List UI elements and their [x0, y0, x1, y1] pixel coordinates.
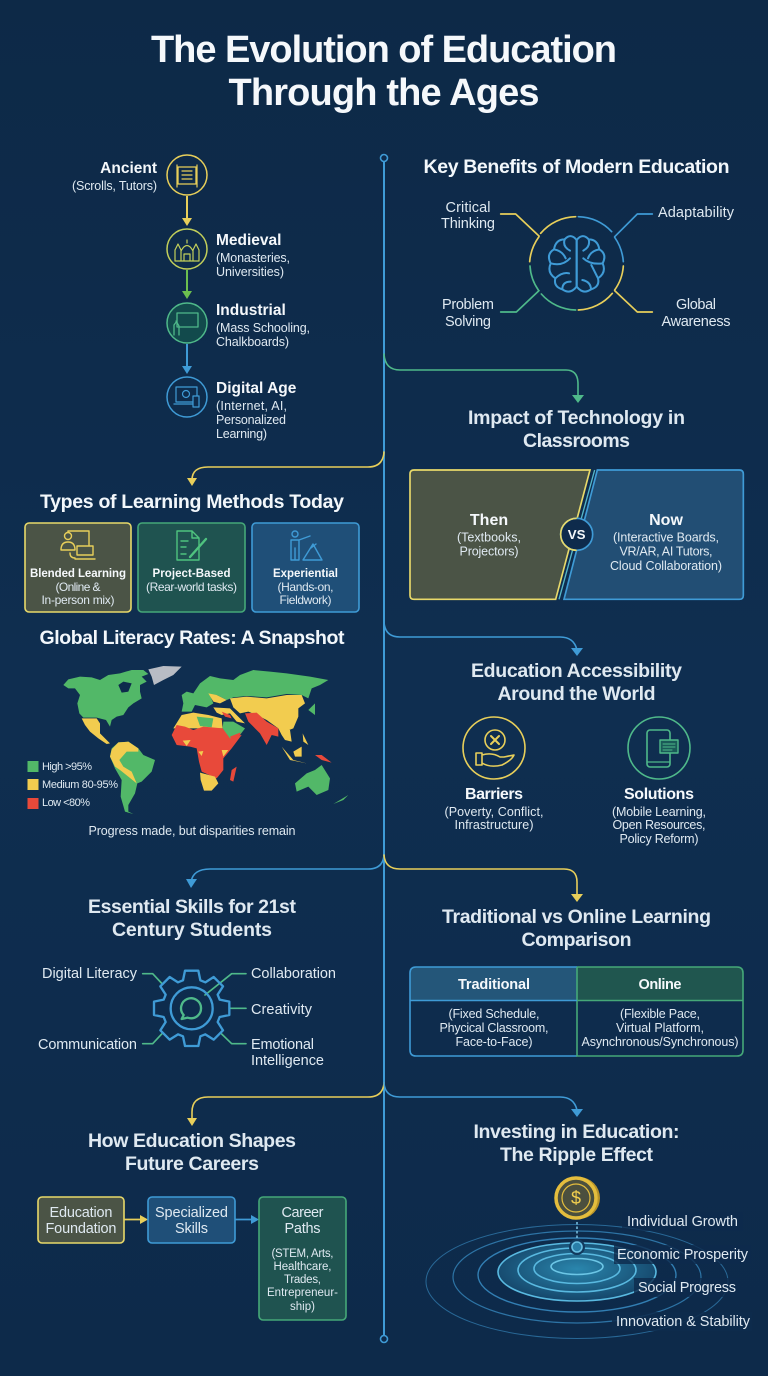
text: medieval: (Monasteries,	[216, 251, 290, 265]
heading: How Education Shapes	[88, 1130, 296, 1152]
skill labels: Collaboration	[251, 966, 336, 982]
heading: Types of Learning Methods Today	[40, 491, 344, 513]
icon: coin: $	[571, 1188, 581, 1208]
card: experiential: (Hands-on,	[278, 580, 334, 594]
heading: Essential Skills for 21st	[88, 896, 296, 918]
comparison table	[410, 967, 743, 1056]
card: project-based: (Rear-world tasks)	[146, 580, 237, 594]
heading: Investing in Education:	[474, 1121, 680, 1143]
text: medieval: Universities)	[216, 265, 284, 279]
then vs now comparison	[410, 470, 743, 599]
gear diagram	[143, 971, 246, 1046]
label: adaptability: Adaptability	[658, 205, 735, 221]
text: now: Cloud Collaboration)	[610, 559, 722, 573]
icon: solutions phone	[628, 717, 690, 779]
box: education foundation: Education	[50, 1205, 112, 1221]
box: career paths: ship)	[290, 1301, 315, 1313]
heading: The Ripple Effect	[500, 1144, 654, 1166]
text: ancient: Ancient	[100, 160, 157, 177]
arrow: to education careers	[187, 1083, 384, 1126]
arrow: to impact of technology	[384, 354, 584, 403]
heading	[442, 906, 711, 951]
text: digital age	[216, 380, 297, 441]
text: medieval: Medieval	[216, 232, 281, 249]
text: then: Projectors)	[460, 544, 518, 558]
legend: Medium 80-95%	[42, 779, 118, 791]
arrow: to learning methods	[187, 452, 384, 486]
panel: learning methods	[25, 491, 359, 612]
heading: Traditional vs Online Learning	[442, 906, 711, 928]
panel: ripple effect	[426, 1121, 752, 1338]
title: Through the Ages	[228, 72, 540, 114]
text: solutions: (Mobile Learning,	[612, 805, 706, 819]
icon: person and mountain	[291, 531, 322, 560]
title: The Evolution of Education	[151, 29, 617, 71]
comparison table: (Fixed Schedule,	[448, 1007, 540, 1021]
arrow: to ripple effect	[384, 1083, 583, 1117]
text: then	[457, 512, 521, 558]
arrow: foundation to skills	[124, 1215, 148, 1224]
box: specialized skills: Skills	[175, 1221, 208, 1237]
text: ancient: (Scrolls, Tutors)	[72, 179, 157, 193]
text: solutions: Solutions	[624, 786, 694, 803]
text: digital age: (Internet, AI,	[216, 399, 287, 413]
icon: industrial chalkboard	[167, 303, 207, 343]
box: specialized skills	[148, 1197, 235, 1243]
panel: impact of technology	[410, 407, 743, 599]
comparison table: Traditional	[458, 977, 530, 993]
box: education foundation: Foundation	[46, 1221, 116, 1237]
text: now: VR/AR, AI Tutors,	[620, 544, 712, 558]
legend	[28, 761, 118, 809]
panel: history timeline	[72, 155, 310, 441]
heading: Century Students	[112, 919, 272, 941]
heading: Global Literacy Rates: A Snapshot	[40, 627, 345, 649]
text: industrial	[216, 302, 310, 349]
label: global awareness: Global	[676, 297, 716, 313]
comparison table: Phycical Classroom,	[440, 1021, 548, 1035]
heading: Around the World	[498, 683, 656, 705]
comparison table: Online	[638, 977, 682, 993]
text: solutions: Policy Reform)	[620, 832, 698, 846]
heading	[88, 896, 296, 941]
text: barriers	[444, 786, 544, 832]
text: barriers: Barriers	[465, 786, 523, 803]
comparison table: Face-to-Face)	[456, 1035, 532, 1049]
text: digital age: Learning)	[216, 427, 267, 441]
card: experiential	[252, 523, 359, 612]
card: experiential: Experiential	[273, 568, 338, 580]
icon: document and pencil	[177, 531, 206, 560]
text: industrial: (Mass Schooling,	[216, 321, 310, 335]
title	[151, 29, 617, 114]
heading	[474, 1121, 680, 1166]
arrow: skills to careers	[235, 1215, 259, 1224]
label: critical thinking: Thinking	[441, 216, 495, 232]
text: now	[610, 512, 722, 573]
text: now: Now	[649, 512, 683, 529]
icon: brain	[549, 236, 604, 292]
heading: Education Accessibility	[471, 660, 682, 682]
card: blended learning: (Online &	[56, 580, 100, 594]
text: barriers: Infrastructure)	[454, 818, 534, 832]
heading	[468, 407, 685, 452]
text: medieval	[216, 232, 290, 279]
box: career paths: Entrepreneur-	[267, 1287, 338, 1299]
ripple labels: Economic Prosperity	[617, 1247, 749, 1263]
timeline connectors	[182, 196, 192, 374]
card: blended learning: In-person mix)	[42, 593, 114, 607]
skill labels	[38, 966, 336, 1069]
legend: High >95%	[42, 761, 92, 773]
comparison table: Asynchronous/Synchronous)	[582, 1035, 738, 1049]
ripple labels: Innovation & Stability	[616, 1314, 751, 1330]
label: critical thinking: Critical	[446, 200, 490, 216]
heading: Classrooms	[523, 430, 630, 452]
text: barriers: (Poverty, Conflict,	[444, 805, 544, 819]
box: education foundation	[38, 1197, 124, 1243]
ripple rings	[426, 1224, 728, 1338]
icon: person and laptop	[61, 531, 95, 559]
heading	[471, 660, 682, 705]
central timeline line	[380, 154, 388, 1342]
panel: accessibility	[444, 660, 706, 846]
comparison table: Virtual Platform,	[616, 1021, 704, 1035]
text: ancient	[72, 160, 157, 193]
label: problem solving: Solving	[445, 314, 491, 330]
ripple labels: Individual Growth	[627, 1214, 738, 1230]
ripple labels	[612, 1212, 752, 1331]
panel: key benefits	[424, 156, 735, 330]
heading: Impact of Technology in	[468, 407, 685, 429]
box: career paths	[259, 1197, 346, 1320]
heading	[88, 1130, 296, 1175]
text: then: Then	[470, 512, 508, 529]
box: career paths: Healthcare,	[274, 1261, 332, 1273]
icon: coin	[556, 1177, 600, 1219]
text: digital age: Personalized	[216, 413, 286, 427]
card: blended learning	[25, 523, 131, 612]
ripple labels: Social Progress	[638, 1280, 736, 1296]
label: global awareness	[662, 297, 730, 330]
text: then: (Textbooks,	[457, 530, 521, 544]
legend: Low <80%	[42, 797, 90, 809]
card: project-based: Project-Based	[152, 568, 230, 580]
world literacy map	[63, 666, 348, 814]
box: career paths: Trades,	[284, 1274, 321, 1286]
heading: Key Benefits of Modern Education	[424, 156, 730, 178]
vs badge: VS	[568, 527, 586, 542]
text: now: (Interactive Boards,	[613, 530, 719, 544]
skill labels: Communication	[38, 1037, 137, 1053]
text: solutions	[612, 786, 706, 846]
card: project-based	[138, 523, 245, 612]
panel: traditional vs online	[410, 906, 743, 1056]
text: digital age: Digital Age	[216, 380, 297, 397]
text: industrial: Chalkboards)	[216, 335, 289, 349]
icon: gear	[154, 971, 229, 1046]
leader lines	[143, 974, 246, 1044]
label: global awareness: Awareness	[662, 314, 730, 330]
arrow: to traditional vs online	[384, 855, 583, 902]
label: problem solving: Problem	[442, 297, 494, 313]
panel: essential skills	[38, 896, 336, 1069]
caption: Progress made, but disparities remain	[88, 824, 296, 838]
arrow: to essential skills	[186, 855, 384, 888]
panel: future careers	[38, 1130, 346, 1320]
skill labels: Digital Literacy	[42, 966, 138, 982]
comparison table: (Flexible Pace,	[620, 1007, 700, 1021]
label: critical thinking	[441, 200, 495, 232]
heading: Future Careers	[125, 1153, 259, 1175]
skill labels: Emotional	[251, 1037, 314, 1053]
skill labels: Creativity	[251, 1002, 313, 1018]
box: specialized skills: Specialized	[155, 1205, 228, 1221]
icon: digital age devices	[167, 377, 207, 417]
skill labels: Intelligence	[251, 1053, 324, 1069]
panel: global literacy	[28, 627, 348, 838]
arrow: to accessibility	[384, 622, 583, 656]
label: problem solving	[442, 297, 494, 330]
vs badge	[561, 518, 593, 550]
icon: medieval building	[167, 229, 207, 269]
card: experiential: Fieldwork)	[280, 593, 332, 607]
box: career paths: Career	[282, 1205, 324, 1221]
icon: barriers hand	[463, 717, 525, 779]
icon: ancient scroll	[167, 155, 207, 195]
text: solutions: Open Resources,	[612, 818, 706, 832]
card: blended learning: Blended Learning	[30, 568, 126, 580]
box: career paths: (STEM, Arts,	[272, 1248, 334, 1260]
box: career paths: Paths	[284, 1221, 320, 1237]
brain ring diagram	[501, 214, 652, 312]
heading: Comparison	[522, 929, 632, 951]
drop marker	[569, 1222, 585, 1255]
text: industrial: Industrial	[216, 302, 286, 319]
